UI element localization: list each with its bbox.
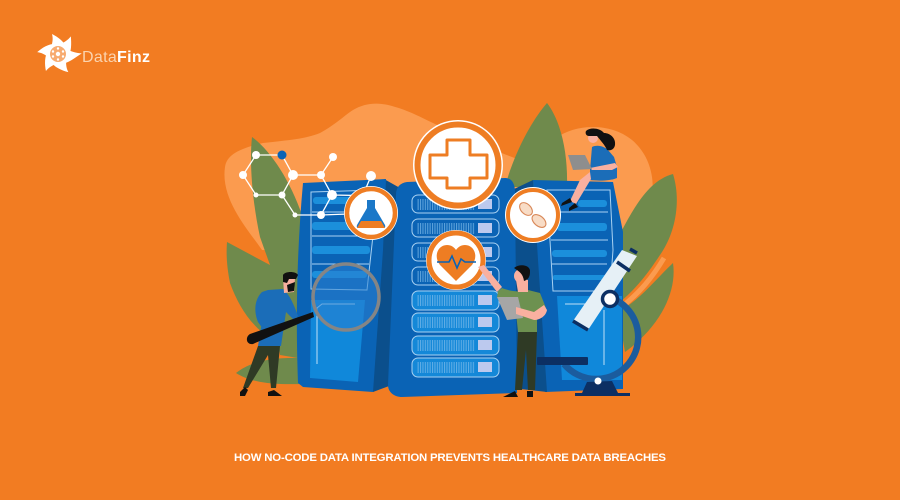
person: man with tablet [478, 265, 547, 397]
background blobs [224, 104, 653, 260]
leaf: right upper [620, 174, 677, 302]
logo: DataFinz: DataFinz [82, 49, 150, 66]
leaf: ground [236, 358, 302, 384]
title: HOW NO-CODE DATA INTEGRATION PREVENTS HEALTHCARE DATA BREACHES [234, 452, 666, 464]
microscope [537, 249, 638, 396]
slot details [417, 199, 475, 373]
icon: heart badge [426, 230, 486, 290]
person: woman with laptop [561, 129, 618, 211]
logo: DataFinz [37, 34, 150, 76]
molecule diagram [239, 150, 385, 219]
icon: DNA badge [505, 187, 561, 243]
icon: medical cross badge [413, 120, 503, 210]
icon: flask badge [344, 186, 398, 240]
server: left [297, 179, 400, 392]
person: man with magnifier [240, 264, 379, 396]
server: centre [388, 178, 517, 397]
leaf: right lower [618, 263, 674, 352]
leaf: back centre [505, 103, 567, 187]
server: right [512, 180, 623, 392]
leaf: lower left [227, 242, 302, 352]
leaf: back left [251, 137, 310, 360]
server rack slots [412, 195, 499, 377]
leaves [227, 103, 677, 384]
